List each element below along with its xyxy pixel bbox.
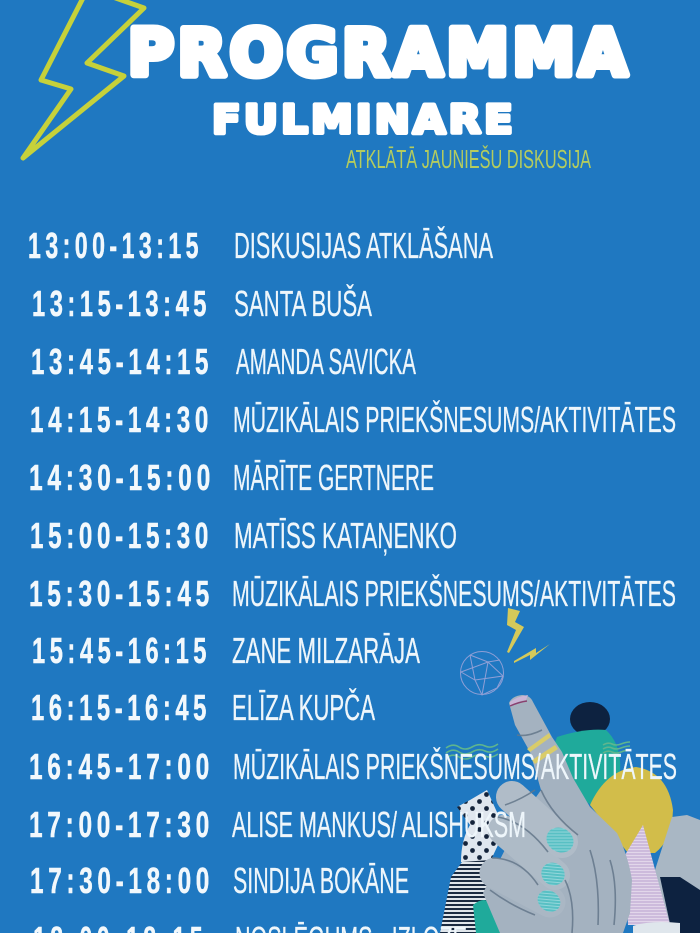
schedule row 10: 16:45-17:00 bbox=[29, 746, 214, 787]
shape: striped pink triangle bbox=[625, 825, 670, 925]
hand bbox=[483, 695, 632, 933]
schedule row 4: 14:15-14:30 bbox=[30, 399, 213, 440]
schedule row 3: 13:45-14:15 bbox=[31, 341, 213, 382]
icon: lightning bolt outline bbox=[23, 0, 144, 158]
shape: grey mountain bbox=[655, 815, 700, 933]
title: PROGRAMMA: PROGRAMMA bbox=[128, 17, 631, 91]
shape: teal blob bbox=[545, 730, 620, 806]
fingernails bbox=[533, 823, 578, 916]
schedule row 11: 17:00-17:30 bbox=[29, 804, 214, 845]
shape: dark mountain bbox=[660, 877, 700, 933]
schedule row 7 bbox=[29, 573, 676, 614]
schedule row 8: 15:45-16:15 bbox=[32, 630, 211, 671]
schedule row 9: ELĪZA KUPČA bbox=[232, 687, 375, 728]
schedule row 5: MĀRĪTE GERTNERE bbox=[233, 457, 434, 498]
badge bbox=[633, 922, 680, 933]
schedule row 1 bbox=[28, 225, 493, 266]
shape: striped patch bbox=[440, 860, 490, 933]
schedule row 10 bbox=[29, 746, 677, 787]
schedule row 5 bbox=[29, 457, 434, 498]
shape: teal bottom blob bbox=[473, 900, 505, 933]
icon: small lightning bolts bbox=[507, 608, 550, 663]
schedule row 9: 16:15-16:45 bbox=[31, 687, 211, 728]
curled finger: middle bbox=[503, 830, 555, 875]
schedule row 6: 15:00-15:30 bbox=[30, 515, 213, 556]
schedule row 2: 13:15-13:45 bbox=[32, 283, 211, 324]
schedule row 7: 15:30-15:45 bbox=[29, 573, 214, 614]
shape: wavy lines bbox=[446, 742, 630, 759]
schedule row 3: AMANDA SAVICKA bbox=[236, 341, 416, 382]
shape: yellow circle bbox=[590, 767, 673, 853]
schedule row 2: SANTA BUŠA bbox=[234, 283, 372, 324]
curled finger: top bbox=[512, 797, 562, 842]
schedule row 6 bbox=[30, 515, 457, 556]
shape: dotted patch bbox=[457, 790, 505, 862]
schedule row 8: ZANE MILZARĀJA bbox=[232, 630, 420, 671]
schedule row 5: 14:30-15:00 bbox=[29, 457, 215, 498]
icon: geometric sphere bbox=[460, 652, 504, 695]
raised finger and palm bbox=[483, 695, 632, 933]
hand shading bbox=[490, 730, 615, 933]
schedule row 13 bbox=[33, 919, 467, 933]
schedule row 12: SINDIJA BOKĀNE bbox=[233, 860, 409, 901]
schedule row 11 bbox=[29, 804, 526, 845]
finger rings bbox=[510, 695, 558, 764]
subtitle: FULMINARE: FULMINARE bbox=[212, 98, 516, 143]
schedule row 6: MATĪSS KATAŅENKO bbox=[234, 515, 457, 556]
illustration: collage with hand bbox=[440, 608, 700, 933]
curled finger: bottom bbox=[495, 873, 550, 902]
shape: dark circle bbox=[570, 702, 610, 736]
schedule row 4 bbox=[30, 399, 676, 440]
schedule row 1: DISKUSIJAS ATKLĀŠANA bbox=[234, 225, 493, 266]
schedule row 12: 17:30-18:00 bbox=[30, 860, 214, 901]
schedule row 1: 13:00-13:15 bbox=[28, 225, 203, 266]
